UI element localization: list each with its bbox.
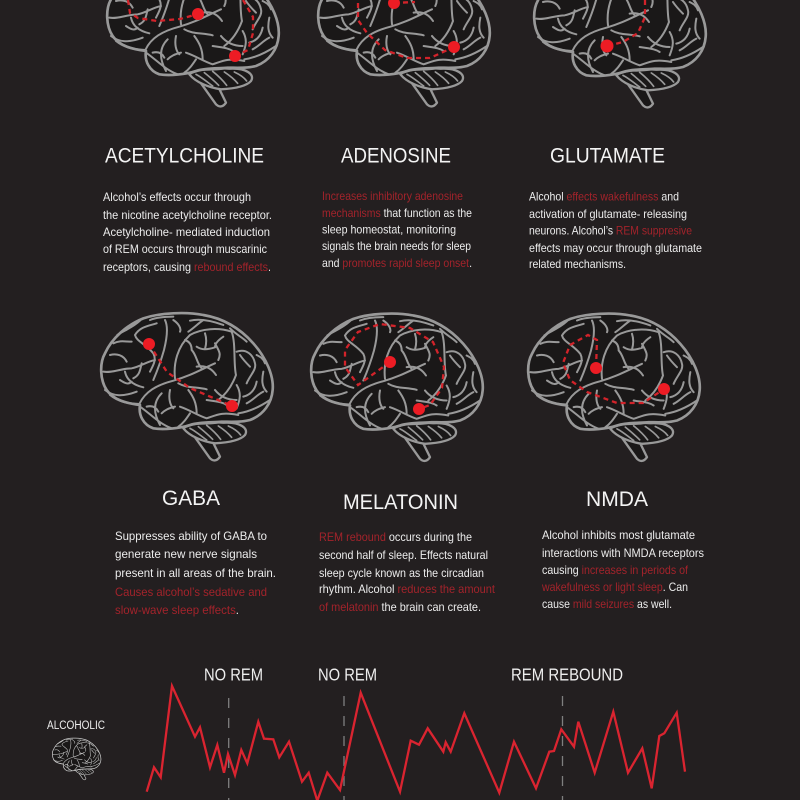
text block: causing increases in periods of [542, 563, 689, 577]
line chart: sleep stages [147, 664, 685, 800]
heading: ACETYLCHOLINE [105, 144, 264, 168]
text block: the nicotine acetylcholine receptor. [103, 208, 272, 222]
text block: Increases inhibitory adenosine [322, 189, 463, 203]
text block [541, 528, 704, 611]
text block [322, 189, 472, 270]
label: no REM: NO REM [318, 664, 377, 684]
text block: signals the brain needs for sleep [322, 239, 471, 253]
heading: GABA [162, 486, 221, 510]
panel: glutamate [529, 0, 706, 271]
text block [115, 529, 276, 617]
panel: melatonin [311, 314, 496, 614]
text block: neurons. Alcohol’s REM suppresive [529, 224, 692, 238]
panel: acetylcholine [103, 0, 279, 274]
text block: related mechanisms. [529, 257, 626, 271]
text block: and promotes rapid sleep onset. [322, 256, 472, 270]
text block: interactions with NMDA receptors [542, 546, 704, 560]
text block [103, 190, 272, 274]
icon: brain with red pathway [534, 0, 706, 107]
text block: of REM occurs through muscarinic [103, 242, 267, 256]
icon: brain with red pathway [311, 314, 483, 461]
red sleep trace [147, 686, 685, 800]
text block: activation of glutamate- releasing [529, 207, 687, 221]
text block: Alcohol’s effects occur through [103, 190, 251, 204]
text block: second half of sleep. Effects natural [319, 548, 488, 562]
text block: wakefulness or light sleep. Can [541, 580, 688, 594]
icon: brain with red pathway [107, 0, 279, 106]
text block [319, 530, 496, 614]
text block: sleep cycle known as the circadian [319, 566, 484, 580]
text block: generate new nerve signals [115, 547, 257, 561]
text block: sleep homeostat, monitoring [322, 222, 456, 236]
label: REM rebound: REM REBOUND [511, 664, 623, 684]
dashed marker [562, 696, 564, 800]
text block: Alcohol inhibits most glutamate [542, 528, 695, 542]
text block: effects may occur through glutamate [529, 241, 702, 255]
text block [529, 190, 702, 271]
text block: rhythm. Alcohol reduces the amount [319, 582, 496, 596]
text block: receptors, causing rebound effects. [103, 260, 271, 274]
icon: brain with red pathway [101, 313, 273, 460]
text block: Alcohol effects wakefulness and [529, 190, 679, 204]
text block: present in all areas of the brain. [115, 566, 276, 580]
text block: mechanisms that function as the [322, 206, 472, 220]
text block: Suppresses ability of GABA to [115, 529, 267, 543]
icon: small brain [52, 738, 101, 780]
label: no REM: NO REM [204, 664, 263, 684]
text block: Acetylcholine- mediated induction [103, 225, 270, 239]
legend: alcoholic brain [47, 720, 105, 780]
panel: adenosine [318, 0, 490, 270]
icon: brain with red pathway [318, 0, 490, 106]
heading: ADENOSINE [341, 144, 451, 168]
dashed marker [343, 696, 345, 800]
icon: brain with red pathway [528, 314, 700, 461]
legend label: ALCOHOLIC [47, 720, 105, 732]
dashed marker [228, 698, 230, 800]
heading: MELATONIN [343, 490, 458, 514]
text block: slow-wave sleep effects. [115, 603, 239, 617]
text block: Causes alcohol’s sedative and [115, 585, 267, 599]
panel: GABA [101, 313, 276, 617]
heading: NMDA [586, 487, 649, 511]
heading: GLUTAMATE [550, 144, 665, 168]
text block: cause mild seizures as well. [542, 597, 672, 611]
text block: REM rebound occurs during the [319, 530, 472, 544]
text block: of melatonin the brain can create. [319, 600, 481, 614]
panel: NMDA [528, 314, 704, 611]
